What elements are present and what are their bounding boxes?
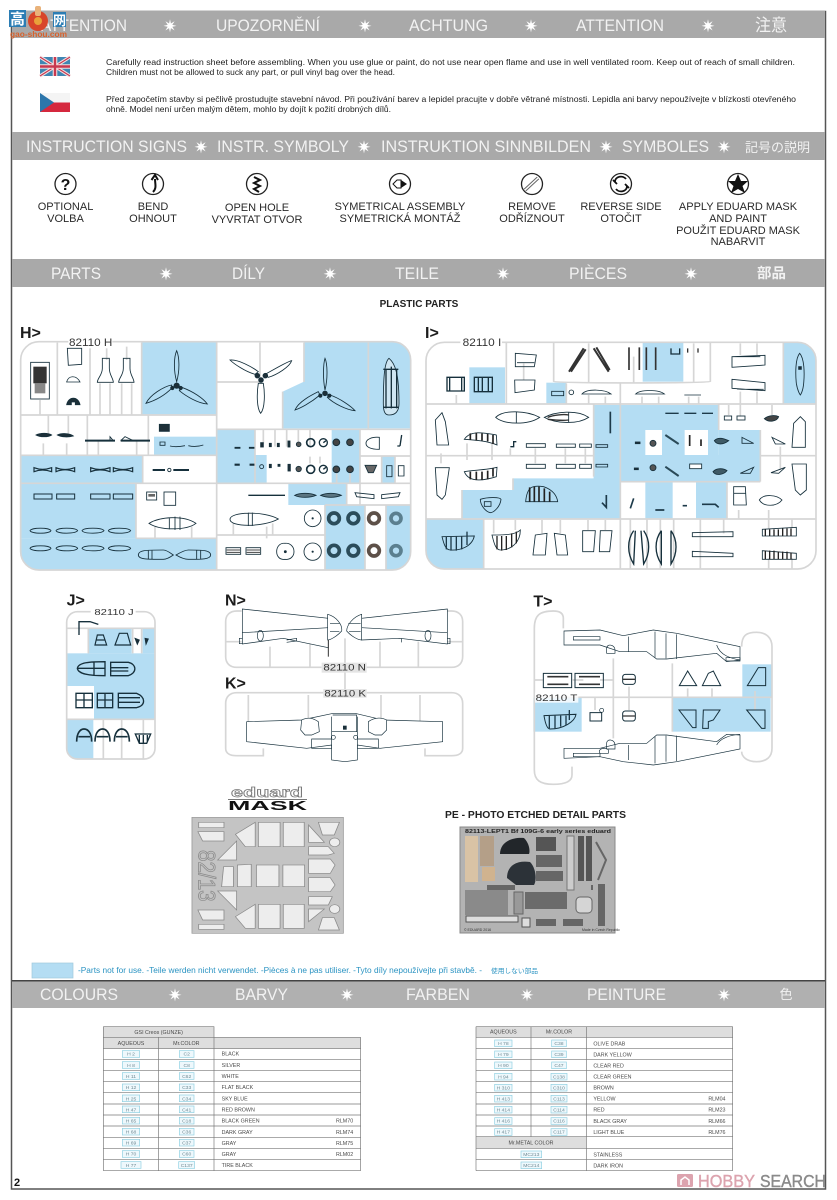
colour table left: GRAY (222, 1152, 237, 1158)
colour table left: H 2 (127, 1052, 135, 1058)
header band: instruction signs: INSTRUCTION SIGNS (26, 137, 187, 156)
colour table left: C60 (182, 1152, 191, 1158)
header band: colours: BARVY (235, 985, 288, 1004)
colour table left: H 70 (126, 1152, 136, 1158)
icon sign: open hole: OPEN HOLE (225, 202, 289, 214)
text: English warning: Carefully read instruction sheet before assembling. When you use glue or paint, do not use near open flame and use in well ventilated room. Keep out of reach of small children. (106, 57, 795, 67)
icon sign: symmetrical assembly: SYMETRICKÁ MONTÁŽ (339, 212, 461, 225)
header band: instruction signs (12, 132, 825, 160)
colour table left: RLM02 (336, 1152, 353, 1158)
legend: parts not for use (32, 963, 538, 978)
colour table left: H 8 (127, 1063, 135, 1069)
header band: instruction signs: ✷ (194, 138, 208, 157)
label: I: I> (425, 325, 439, 342)
colour table right: RED (593, 1108, 605, 1114)
colour table right: LIGHT BLUE (593, 1130, 625, 1136)
colour table right (476, 1027, 733, 1171)
label: H: H> (20, 325, 41, 342)
icon sign: apply mask: NABARVIT (711, 236, 766, 248)
icon sign: apply mask: POUŽIT EDUARD MASK (676, 224, 801, 237)
PE fret: © EDUARD 2016 (464, 928, 491, 932)
header band: attention (12, 11, 825, 38)
logo: gao-shou (9, 6, 67, 39)
colour table right: H 79 (498, 1052, 509, 1058)
label: N: N> (225, 593, 246, 610)
colour table left: H 25 (126, 1096, 136, 1102)
header band: colours: ✷ (717, 986, 731, 1005)
colour table left: TIRE BLACK (222, 1163, 253, 1169)
text: Czech warning (106, 94, 796, 114)
colour table right: RLM23 (708, 1108, 726, 1114)
colour table right: C116 (553, 1119, 565, 1125)
icon sign: bend: OHNOUT (129, 213, 177, 225)
colour table left: C18 (182, 1119, 191, 1125)
colour table left: FLAT BLACK (222, 1085, 254, 1091)
colour table right: C47 (554, 1063, 564, 1069)
icon sign: bend: BEND (138, 201, 168, 213)
colour table left: Mr.COLOR (173, 1041, 200, 1047)
header band: colours (12, 980, 825, 1008)
label: K: K> (225, 675, 246, 692)
colour table right: CLEAR RED (593, 1063, 624, 1069)
legend: parts not for use: -Parts not for use. -Teile werden nicht verwendet. -Pièces à ne pas utiliser. -Tyto díly nepoužívejte při stavbě. - (78, 965, 482, 975)
header band: colours: ✷ (520, 986, 534, 1005)
header band: instruction signs: ✷ (717, 138, 731, 157)
colour table right: Mr.METAL COLOR (508, 1140, 554, 1146)
colour table right: C310 (553, 1085, 565, 1091)
colour table left: AQUEOUS (118, 1041, 145, 1047)
header band: parts: PIÈCES (569, 264, 627, 283)
colour table right: OLIVE DRAB (593, 1041, 626, 1047)
colour table right: H 78 (498, 1041, 509, 1047)
colour table right: Mr.COLOR (546, 1029, 572, 1035)
header band: colours: PEINTURE (587, 985, 666, 1004)
label: T: T> (533, 594, 552, 611)
legend: parts not for use: 使用しない部品 (491, 966, 538, 975)
header band: attention: ✷ (701, 17, 715, 36)
header band: instruction signs: 記号の説明 (745, 140, 810, 155)
colour table right: H 310 (497, 1085, 510, 1091)
colour table right: STAINLESS (593, 1152, 623, 1158)
colour table left: SILVER (222, 1063, 240, 1069)
sprues J N K (66, 593, 463, 762)
header band: attention: ✷ (524, 17, 538, 36)
icon sign: remove: REMOVE (508, 201, 556, 213)
header band: attention: ATTENTION (41, 16, 127, 35)
colour table left: C2 (183, 1052, 190, 1058)
header band: parts: ✷ (159, 265, 173, 284)
header band: parts: ✷ (323, 265, 337, 284)
colour table right: RLM66 (708, 1119, 726, 1125)
text: Czech warning: ohně. Model není určen malým dětem, mohlo by dojít k požití drobných dílů. (106, 104, 391, 114)
colour table right: C114 (553, 1107, 565, 1113)
header band: instruction signs: ✷ (357, 138, 371, 157)
header band: parts: ✷ (684, 265, 698, 284)
colour table left: C62 (182, 1074, 191, 1080)
label: J: J> (67, 593, 85, 610)
colour table right: H 414 (497, 1107, 510, 1113)
colour table right: H 413 (497, 1096, 510, 1102)
colour table left: H 65 (126, 1119, 136, 1125)
colour table left: GSI Creos (GUNZE) (134, 1030, 183, 1036)
sprue I details (435, 347, 806, 564)
colour table left: H 68 (126, 1130, 136, 1136)
icon sign: reverse side (580, 174, 662, 225)
colour table right: RLM76 (708, 1130, 726, 1136)
colour table right: AQUEOUS (490, 1029, 517, 1035)
sprue J: 82110 J (94, 607, 134, 617)
colour table left: C8 (183, 1063, 190, 1069)
colour table right: C138 (553, 1074, 565, 1080)
header band: colours: COLOURS (40, 985, 118, 1004)
header band: parts: PARTS (51, 264, 101, 283)
header band: colours: 色 (779, 987, 793, 1002)
header band: parts: TEILE (395, 264, 439, 283)
sprue J (66, 607, 156, 760)
text: English warning: Children must not be allowed to suck any part, or pull vinyl bag over the head. (106, 67, 395, 77)
colour table left: C36 (182, 1130, 191, 1136)
colour table right: BROWN (593, 1086, 614, 1092)
sprue K: 82110 K (324, 688, 366, 698)
heading: PE parts: PE - PHOTO ETCHED DETAIL PARTS (445, 810, 626, 821)
colour table right: C113 (553, 1096, 565, 1102)
colour table right: C117 (553, 1130, 565, 1136)
header band: attention: ✷ (358, 17, 372, 36)
colour table left: BLACK (222, 1052, 240, 1058)
header band: instruction signs: INSTRUKTION SINNBILDEN (381, 137, 591, 156)
colour table right: BLACK GRAY (593, 1119, 627, 1125)
header band: attention: UPOZORNĚNÍ (216, 16, 320, 35)
PE fret: Made in Czech Republic (582, 928, 620, 932)
colour table right: YELLOW (593, 1097, 617, 1103)
icon sign: remove (499, 174, 565, 225)
colour table right: C39 (554, 1052, 564, 1058)
header band: parts: DÍLY (232, 264, 265, 283)
colour table left: SKY BLUE (222, 1097, 248, 1103)
icon sign: optional: ? (61, 177, 70, 194)
sprue I (425, 337, 817, 570)
colour table left: RED BROWN (222, 1108, 255, 1114)
colour table left: H 11 (126, 1074, 136, 1080)
sprue T (533, 594, 772, 784)
header band: instruction signs: SYMBOLES (622, 137, 709, 156)
colour table right: H 94 (498, 1074, 509, 1080)
logo: gao-shou: gao-shou.com (10, 30, 67, 39)
sprue T: 82110 T (536, 693, 578, 703)
PE fret (460, 827, 620, 933)
logo: hobby search: HOBBY (698, 1171, 755, 1191)
icon sign: symmetrical assembly: SYMETRICAL ASSEMBLY (335, 201, 466, 213)
colour table left: RLM75 (336, 1141, 353, 1147)
header band: attention: ACHTUNG (409, 16, 488, 35)
eduard mask logo (228, 784, 308, 813)
colour table right: H 417 (497, 1130, 510, 1136)
icon: Czech flag (40, 93, 70, 112)
header band: parts: 部品 (757, 265, 786, 281)
logo: hobby search: SEARCH (760, 1171, 826, 1191)
icon sign: optional: VOLBA (47, 213, 85, 225)
sprue N: 82110 N (323, 663, 366, 673)
colour table right: DARK IRON (593, 1163, 623, 1169)
icon sign: reverse side: REVERSE SIDE (580, 201, 662, 213)
logo: hobby search (677, 1171, 826, 1191)
sprue K (226, 688, 463, 762)
icon sign: reverse side: OTOČIT (600, 212, 642, 225)
icon sign: optional: OPTIONAL (38, 201, 93, 213)
colour table right: MC213 (523, 1152, 540, 1158)
eduard mask logo: MASK (228, 798, 308, 813)
icon sign: open hole: VYVRTAT OTVOR (212, 214, 302, 226)
eduard mask logo: eduard (231, 784, 303, 800)
icon sign: apply mask (676, 174, 801, 248)
header band: instruction signs: ✷ (599, 138, 613, 157)
colour table right: DARK YELLOW (593, 1052, 633, 1058)
colour table left: BLACK GREEN (222, 1119, 260, 1125)
colour table left: H 77 (126, 1163, 136, 1169)
colour table right: MC214 (523, 1163, 540, 1169)
colour table left: H 69 (126, 1141, 136, 1147)
header band: colours: FARBEN (406, 985, 470, 1004)
colour table left (103, 1027, 361, 1171)
mask sheet: 82/13 (193, 850, 220, 902)
part number I: 82110 I (463, 337, 501, 349)
sprue H (20, 337, 412, 571)
colour table left: GRAY (222, 1141, 237, 1147)
sprue N (226, 609, 463, 693)
colour table left: H 47 (126, 1107, 136, 1113)
header band: parts (12, 259, 825, 287)
sprue H details (30, 348, 404, 560)
text: Czech warning: Před započetím stavby si pečlivě prostudujte stavební návod. Při používání barev a lepidel pracujte v dobře větrané místnosti. Lepidla ani barvy nepoužívejte v blízkosti otevřeného (106, 94, 796, 104)
header band: attention: 注意 (755, 16, 787, 35)
colour table left: RLM70 (336, 1119, 353, 1125)
heading: plastic parts: PLASTIC PARTS (380, 299, 459, 310)
colour table left: C41 (182, 1107, 191, 1113)
header band: colours: ✷ (168, 986, 182, 1005)
icon sign: bend (129, 174, 177, 225)
logo: gao-shou: 高 (10, 11, 25, 28)
part number H: 82110 H (69, 337, 112, 349)
icon sign: apply mask: AND PAINT (709, 213, 767, 225)
icon sign: open hole (212, 174, 302, 226)
colour table right: CLEAR GREEN (593, 1075, 632, 1081)
mask sheet (192, 817, 343, 933)
colour table right: C38 (554, 1041, 564, 1047)
icon sign: apply mask: APPLY EDUARD MASK (679, 201, 798, 213)
header band: instruction signs: INSTR. SYMBOLY (217, 137, 349, 156)
header band: parts: ✷ (496, 265, 510, 284)
colour table left: C137 (181, 1163, 193, 1169)
colour table left: H 12 (126, 1085, 136, 1091)
icon sign: remove: ODŘÍZNOUT (499, 212, 565, 225)
header band: colours: ✷ (340, 986, 354, 1005)
header band: attention: ✷ (163, 17, 177, 36)
header band: attention: ATTENTION (576, 16, 664, 35)
icon sign: optional (38, 174, 93, 225)
logo: gao-shou: 网 (53, 13, 66, 28)
colour table left: WHITE (222, 1074, 239, 1080)
icon sign: symmetrical assembly (335, 174, 466, 225)
colour table right: H 416 (497, 1119, 510, 1125)
colour table left: C34 (182, 1096, 191, 1102)
colour table left: RLM74 (336, 1130, 353, 1136)
colour table left: C33 (182, 1085, 191, 1091)
colour table left: C37 (182, 1141, 191, 1147)
colour table right: H 90 (498, 1063, 509, 1069)
page number: 2 (14, 1177, 20, 1189)
PE fret: 82113-LEPT1 Bf 109G-6 early series eduard (465, 829, 611, 835)
colour table left: DARK GRAY (222, 1130, 253, 1136)
text: English warning (106, 57, 795, 77)
icon: UK flag (40, 57, 70, 76)
colour table right: RLM04 (708, 1097, 726, 1103)
